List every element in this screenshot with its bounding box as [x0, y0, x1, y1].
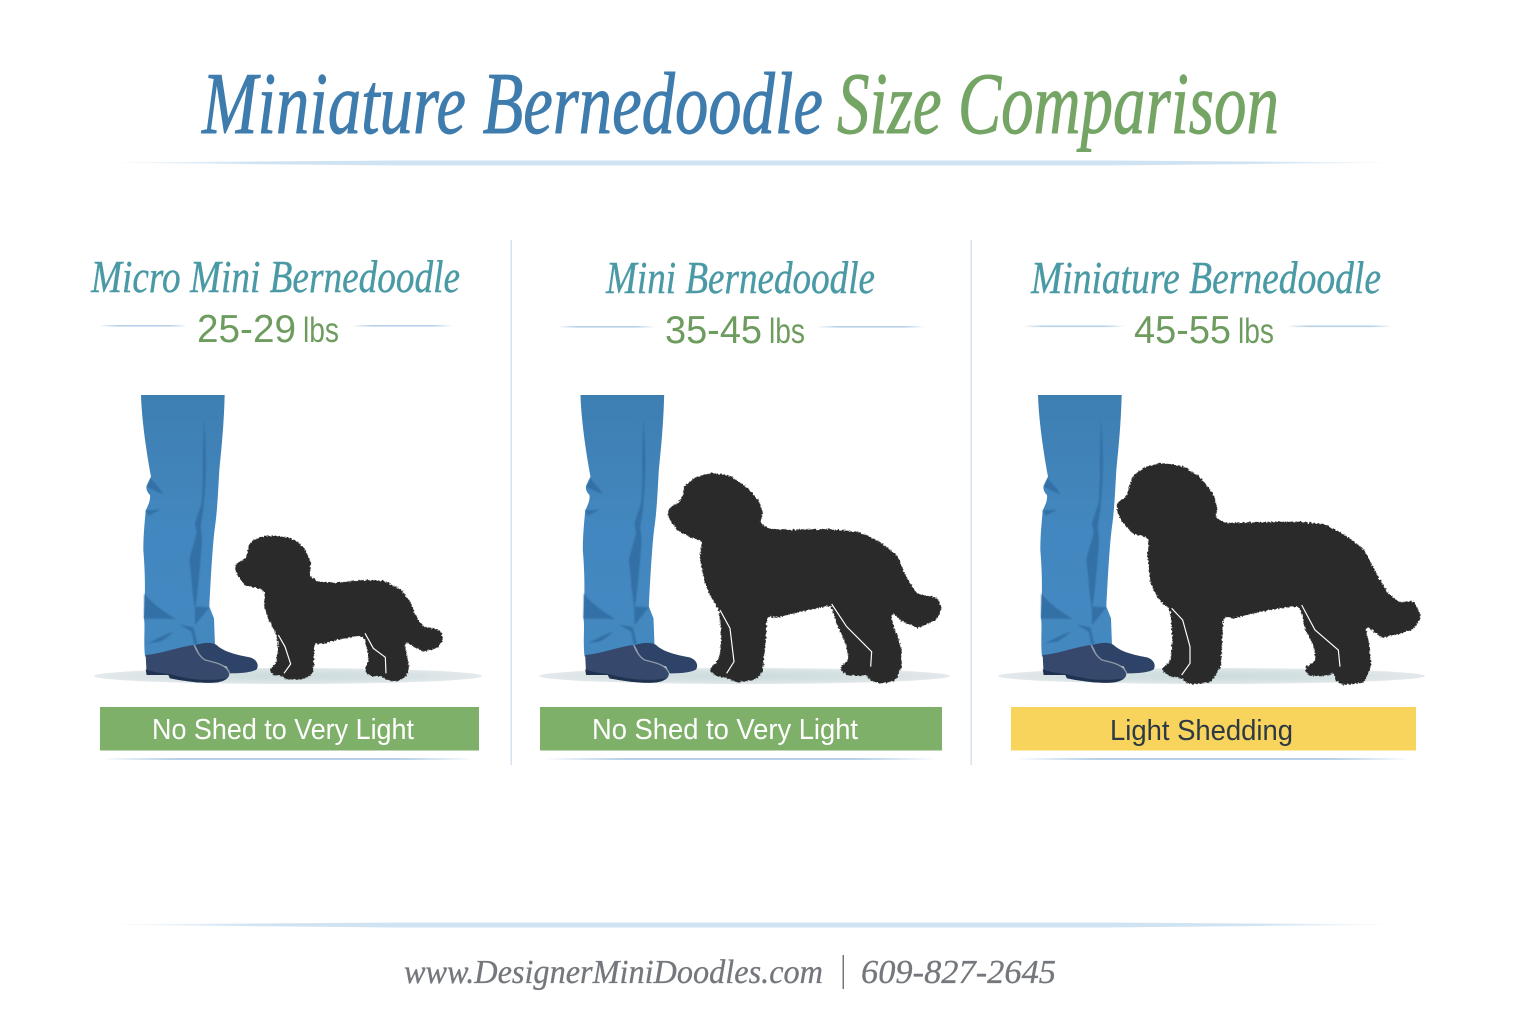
- heading: mini: Mini Bernedoodle: [605, 252, 875, 303]
- heading: micro mini: Micro Mini Bernedoodle: [90, 251, 460, 302]
- title: Size Comparison: [837, 56, 1279, 153]
- panel: miniature: [998, 252, 1425, 760]
- ground shadow: [94, 668, 482, 684]
- legs and shoes: [141, 395, 258, 683]
- panel: micro mini: [90, 251, 482, 760]
- footer: website and phone: [404, 954, 1056, 991]
- shedding bar: light shedding: Light Shedding: [1110, 715, 1293, 747]
- footer: website and phone: 609-827-2645: [861, 954, 1056, 991]
- heading: miniature: Miniature Bernedoodle: [1030, 252, 1381, 303]
- legs and shoes: [1038, 395, 1155, 683]
- footer: website and phone: www.DesignerMiniDoodles.com: [404, 954, 823, 991]
- shedding bar: light shedding: [1011, 707, 1416, 750]
- dog silhouette: miniature: [1118, 464, 1420, 684]
- dog silhouette: micro mini: [236, 537, 443, 681]
- dog silhouette: mini: [668, 474, 941, 683]
- weight: 45-55 lbs: 45-55lbs: [1134, 309, 1274, 352]
- shedding bar: no shed to very light: No Shed to Very Light: [152, 714, 414, 746]
- ground shadow: [539, 668, 950, 684]
- legs and shoes: [580, 395, 697, 683]
- weight: 35-45 lbs: 35-45lbs: [665, 309, 805, 352]
- weight: 25-29 lbs: 25-29lbs: [197, 308, 339, 351]
- ground shadow: [998, 668, 1425, 684]
- shedding bar: no shed to very light: [100, 707, 479, 750]
- shedding bar: no shed to very light: No Shed to Very Light: [592, 714, 858, 746]
- title: Miniature Bernedoodle: [200, 56, 823, 153]
- shedding bar: no shed to very light: [540, 707, 942, 750]
- panel: mini: [539, 252, 950, 760]
